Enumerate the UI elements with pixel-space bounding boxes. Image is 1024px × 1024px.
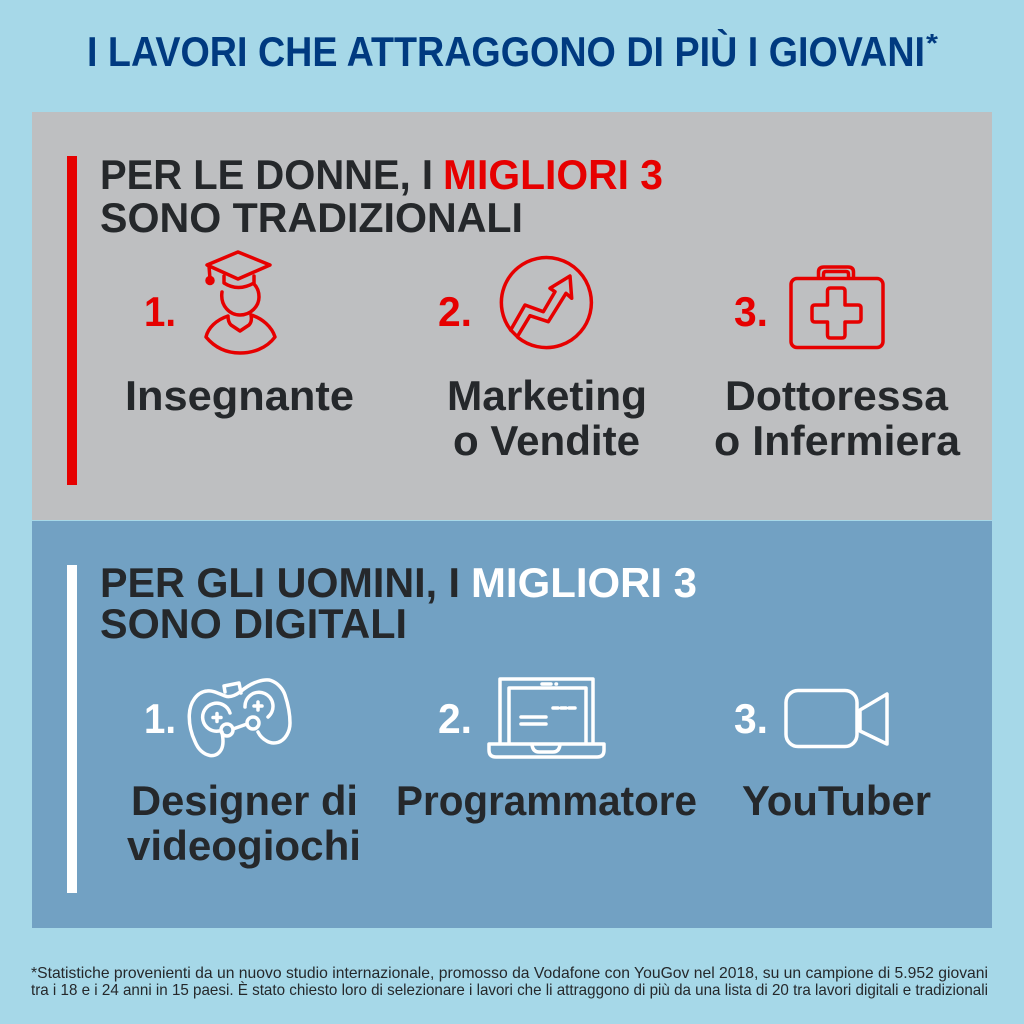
heading: men: MIGLIORI 3 [471, 559, 697, 606]
rank 2: men: 2. [438, 695, 472, 742]
label: Marketing o Vendite: Marketing [447, 372, 647, 419]
panel background: blue [32, 521, 992, 928]
icon: rising arrow in circle [501, 258, 591, 348]
icon: graduate [206, 252, 275, 353]
heading: women: MIGLIORI 3 [443, 151, 663, 198]
footnote [31, 965, 988, 999]
label: Dottoressa o Infermiera [714, 372, 961, 464]
label: Designer di videogiochi: videogiochi [127, 822, 361, 869]
heading: women: PER LE DONNE, I [100, 151, 433, 198]
label: Dottoressa o Infermiera: o Infermiera [714, 417, 961, 464]
heading: men: SONO DIGITALI [100, 600, 407, 647]
panel: men [32, 521, 992, 928]
panel background: grey [32, 112, 992, 520]
heading: women [100, 151, 663, 241]
icon: game controller [189, 680, 290, 756]
accent bar: red [67, 156, 77, 485]
label: Marketing o Vendite: o Vendite [453, 417, 640, 464]
label: Marketing o Vendite [447, 372, 647, 464]
heading: men: PER GLI UOMINI, I [100, 559, 460, 606]
label: Dottoressa o Infermiera: Dottoressa [725, 372, 949, 419]
rank 2: women: 2. [438, 288, 472, 335]
icon: first aid kit [791, 267, 883, 348]
footnote: *Statistiche provenienti da un nuovo studio internazionale, promosso da Vodafone con YouGov nel 2018, su un campione di 5.952 giovani [31, 965, 988, 982]
heading: men [100, 559, 697, 647]
label: Designer di videogiochi: Designer di [131, 777, 358, 824]
label: Programmatore: Programmatore [396, 777, 697, 824]
footnote: tra i 18 e i 24 anni in 15 paesi. È stato chiesto loro di selezionare i lavori che li attraggono di più da una lista di 20 tra lavori digitali e tradizionali [31, 980, 988, 999]
rank 3: men: 3. [734, 695, 768, 742]
rank 1: men: 1. [144, 695, 176, 742]
icon: video camera [786, 690, 887, 746]
rank 3: women: 3. [734, 288, 768, 335]
title: * [926, 28, 939, 58]
accent bar: white [67, 565, 77, 893]
label: Insegnante: Insegnante [125, 372, 354, 419]
title: I LAVORI CHE ATTRAGGONO DI PIÙ I GIOVANI [87, 27, 925, 75]
label: Designer di videogiochi [127, 777, 361, 869]
panel: women [32, 112, 992, 520]
heading: women: SONO TRADIZIONALI [100, 194, 523, 241]
icon: laptop [489, 679, 604, 757]
rank 1: women: 1. [144, 288, 176, 335]
label: YouTuber: YouTuber [742, 777, 931, 824]
